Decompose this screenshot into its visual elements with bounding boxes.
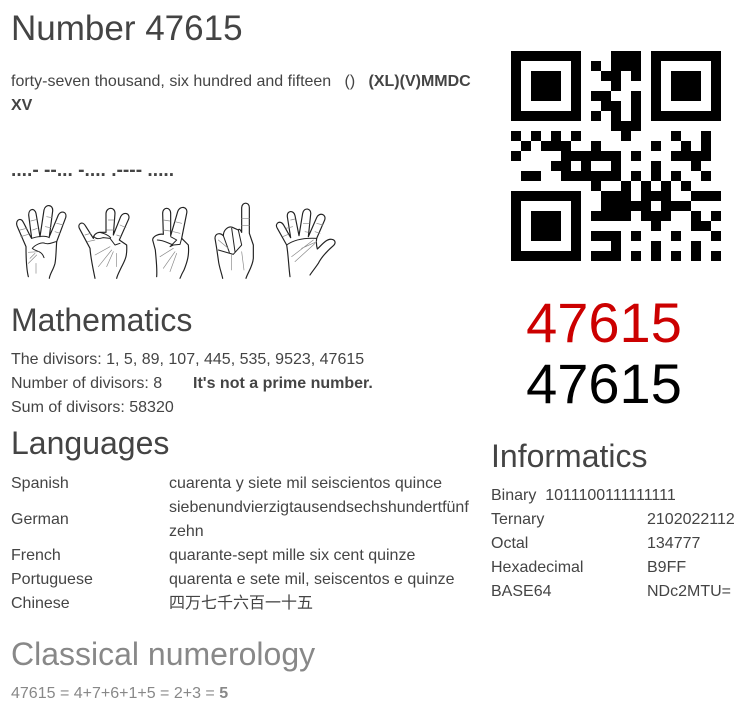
- heading: Informatics: Informatics: [491, 438, 647, 474]
- icon: hand showing seven: [79, 208, 129, 278]
- text block: number of divisors: Number of divisors: 8: [11, 375, 162, 392]
- icon group: hand signs for digits 4 7 6 1 5: [16, 202, 336, 279]
- big number in red: 47615: [526, 291, 682, 354]
- label: base64: BASE64: [491, 583, 551, 600]
- value: ternary: 2102022112: [647, 511, 735, 528]
- big number in black: 47615: [526, 352, 682, 415]
- text block: number in words and roman numeral: XV: [11, 97, 32, 114]
- label: German: German: [11, 511, 69, 528]
- value: Spanish: cuarenta y siete mil seiscientos quince: [169, 475, 442, 492]
- text block: list of divisors: The divisors: 1, 5, 89, 107, 445, 535, 9523, 47615: [11, 351, 364, 368]
- value: German: siebenundvierzigtausendsechshundertfünf: [169, 499, 469, 516]
- value: Chinese: 四万七千六百一十五: [169, 595, 313, 612]
- value: French: quarante-sept mille six cent quinze: [169, 547, 415, 564]
- label: Chinese: Chinese: [11, 595, 70, 612]
- text block: numerology sum: 47615 = 4+7+6+1+5 = 2+3 = 5: [11, 685, 228, 702]
- value: base64: NDc2MTU=: [647, 583, 731, 600]
- label: ternary: Ternary: [491, 511, 544, 528]
- label: Portuguese: Portuguese: [11, 571, 93, 588]
- label: French: French: [11, 547, 61, 564]
- value: octal: 134777: [647, 535, 700, 552]
- icon: hand showing six: [153, 207, 189, 278]
- heading: Mathematics: Mathematics: [11, 302, 192, 338]
- value: hexadecimal: B9FF: [647, 559, 686, 576]
- heading: Languages: Languages: [11, 425, 169, 461]
- label: hexadecimal: Hexadecimal: [491, 559, 583, 576]
- text block: sum of divisors: Sum of divisors: 58320: [11, 399, 174, 416]
- heading: Classical numerology: Classical numerology: [11, 636, 315, 672]
- label: octal: Octal: [491, 535, 528, 552]
- title: Number 47615: [11, 9, 243, 48]
- icon: hand showing five: [276, 209, 335, 277]
- text block: number in words and roman numeral: [11, 73, 471, 114]
- value: German: [169, 499, 469, 540]
- label: Spanish: Spanish: [11, 475, 69, 492]
- text block: prime status: It's not a prime number.: [193, 375, 373, 392]
- value: Portuguese: quarenta e sete mil, seiscentos e quinze: [169, 571, 454, 588]
- table: number in other bases: [491, 487, 735, 600]
- table: number in other languages: [11, 475, 469, 612]
- icon: hand showing four: [17, 206, 66, 278]
- text block: morse code: ....- --... -.... .---- .....: [11, 160, 174, 181]
- icon: hand showing one: [215, 203, 253, 278]
- value: German: zehn: [169, 523, 204, 540]
- row: binary: Binary 1011100111111111: [491, 487, 676, 504]
- text block: number in words and roman numeral: forty-seven thousand, six hundred and fifteen () (XL)(V)MMDC: [11, 73, 471, 90]
- QR code: [511, 51, 721, 261]
